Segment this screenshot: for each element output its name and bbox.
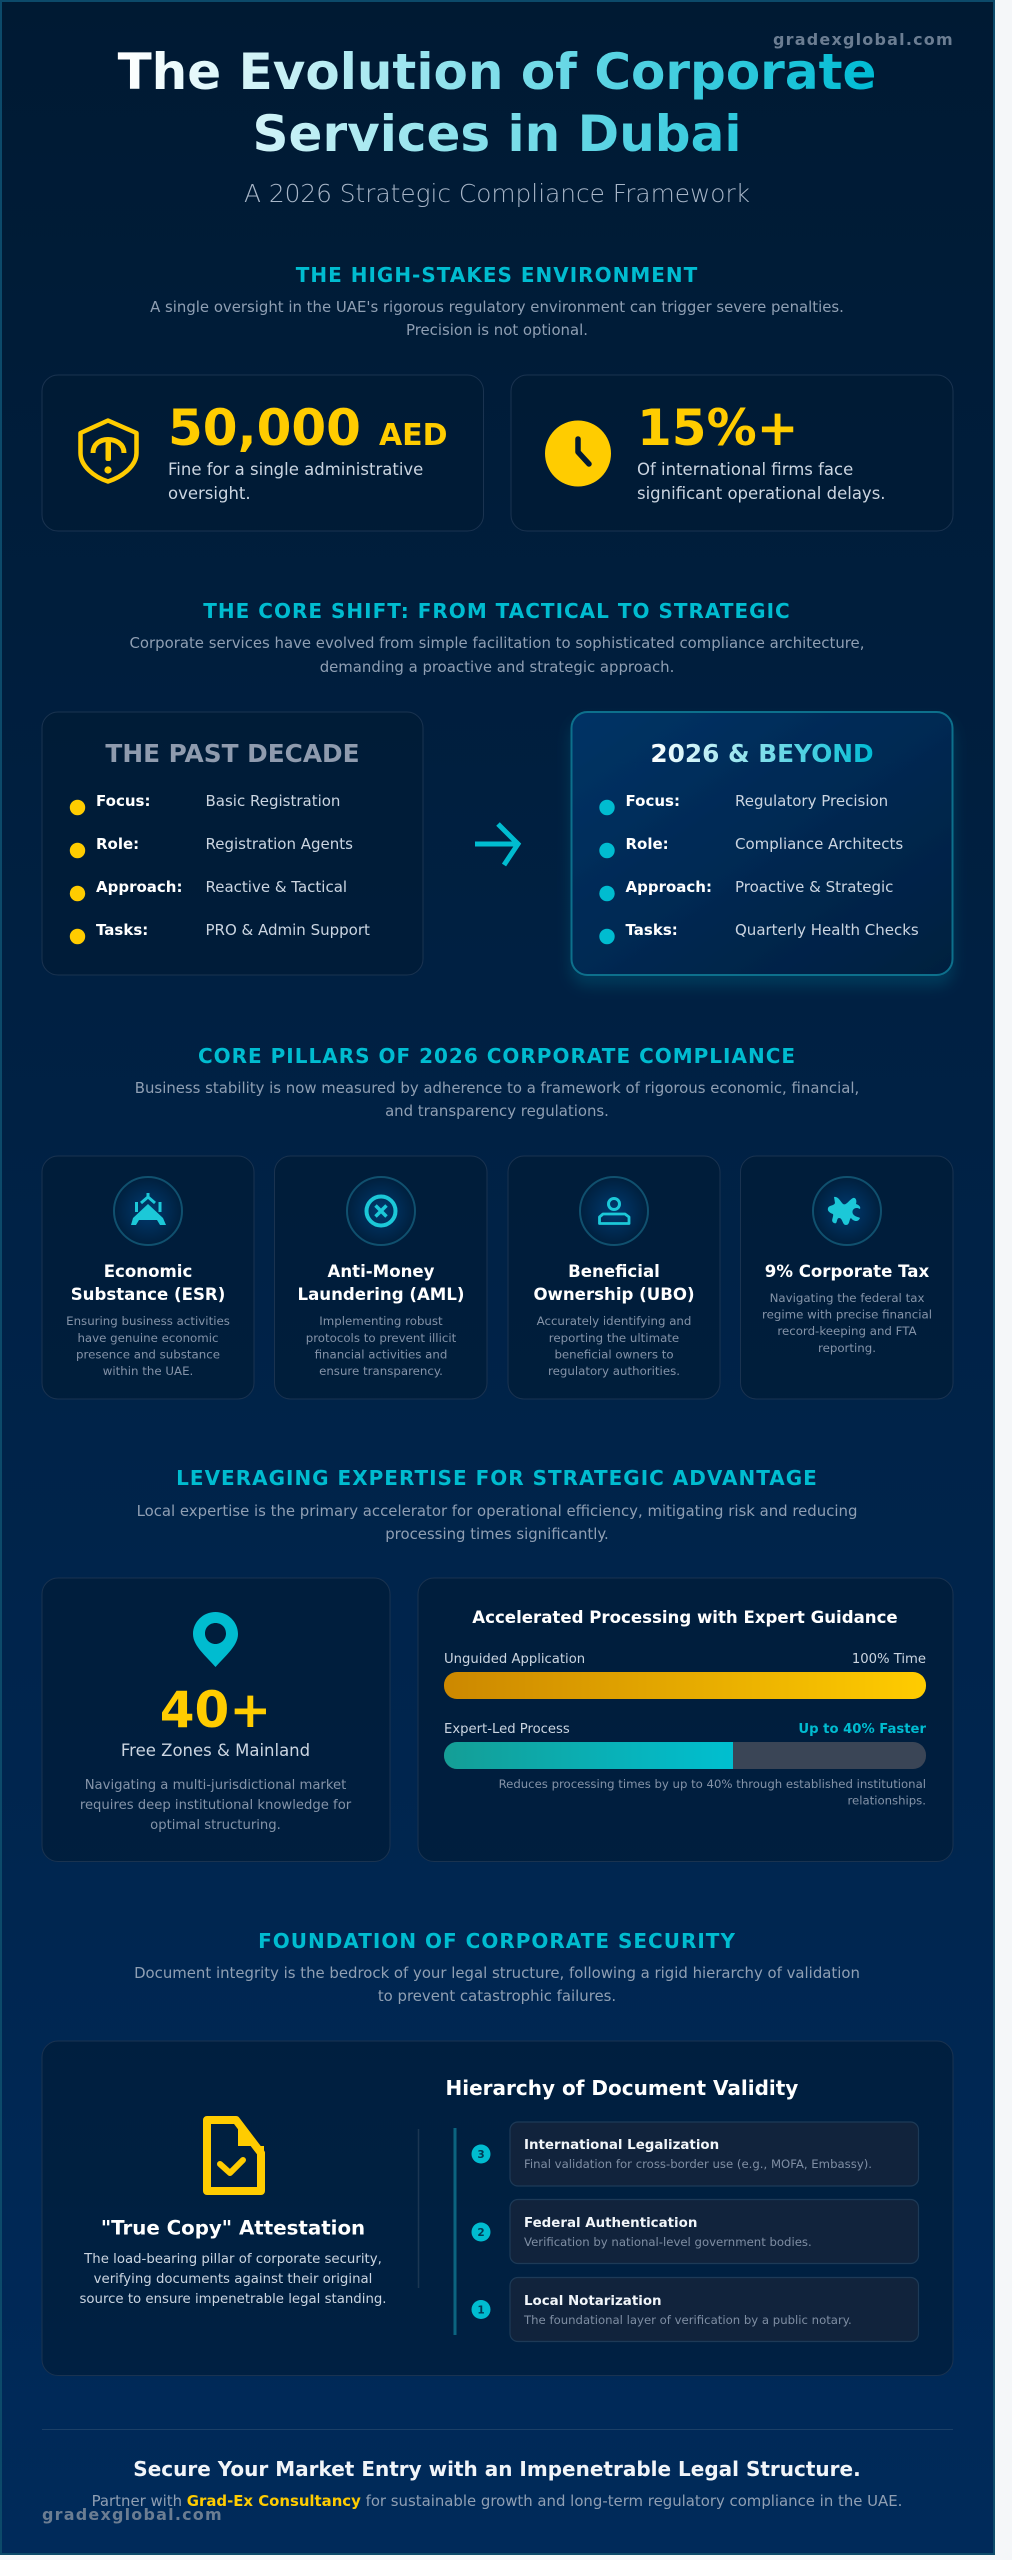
tier 1: The foundational layer of verification by a public notary.: [523, 2313, 852, 2327]
pillar card: UBO: [508, 1156, 720, 1399]
list row: tasks: Tasks:: [626, 921, 678, 939]
list row: role: Role:: [626, 835, 669, 853]
list row: approach: Approach:: [626, 878, 712, 896]
attestation title: "True Copy" Attestation: [101, 2216, 365, 2240]
stat description: significant operational delays.: [637, 484, 886, 503]
tier 2: Federal Authentication: [524, 2216, 697, 2231]
watermark: bottom left: gradexglobal.com: [42, 2505, 223, 2524]
panel: 2026 and beyond: [572, 712, 952, 975]
pillar description: Implementing robust: [319, 1314, 443, 1328]
intro text: A single oversight in the UAE's rigorous regulatory environment can trigger severe penalties.: [150, 298, 844, 316]
bar: expert-led process: Expert-Led Process: [444, 1722, 570, 1737]
header: [118, 43, 876, 208]
list row: focus: Focus:: [96, 792, 150, 810]
icon: prohibited x: [347, 1177, 415, 1245]
icon: person: [580, 1177, 648, 1245]
title: The Evolution of Corporate: [118, 43, 876, 101]
icon: shield warning: [80, 420, 136, 482]
list row: tasks: Tasks:: [96, 921, 148, 939]
pillar card: ESR: [42, 1156, 254, 1399]
intro text: and transparency regulations.: [385, 1102, 609, 1120]
tier 2: [472, 2200, 918, 2264]
intro text: Business stability is now measured by adherence to a framework of rigorous economic, financial,: [135, 1079, 859, 1097]
list row: focus: Focus:: [626, 792, 680, 810]
intro text: processing times significantly.: [385, 1525, 609, 1543]
icon: verified document: [207, 2118, 264, 2191]
stat card: 15%+: [511, 375, 953, 531]
intro text: to prevent catastrophic failures.: [378, 1987, 616, 2005]
intro text: Document integrity is the bedrock of your legal structure, following a rigid hierarchy of validation: [134, 1964, 860, 1982]
stat description: Fine for a single administrative: [168, 460, 423, 479]
pillar card: corporate tax: [740, 1156, 953, 1399]
intro text: Precision is not optional.: [406, 321, 588, 339]
list row: focus: Regulatory Precision: [735, 792, 888, 810]
chart note: relationships.: [847, 1794, 926, 1808]
tier 3: Final validation for cross-border use (e.g., MOFA, Embassy).: [524, 2157, 872, 2171]
list row: approach: Reactive & Tactical: [206, 878, 347, 896]
panel: processing bar chart: [418, 1578, 953, 1862]
pillar description: financial activities and: [315, 1348, 447, 1362]
section: high-stakes environment: [42, 263, 953, 531]
tier 1: Local Notarization: [524, 2294, 662, 2309]
pillar description: beneficial owners to: [554, 1348, 674, 1362]
pillar card: AML: [274, 1156, 487, 1399]
section: core pillars: [42, 1044, 953, 1399]
attestation description: source to ensure impenetrable legal standing.: [79, 2292, 387, 2307]
section: foundation of corporate security: [42, 1929, 953, 2376]
pillar title: 9% Corporate Tax: [765, 1262, 929, 1281]
subtitle: A 2026 Strategic Compliance Framework: [244, 179, 750, 208]
hierarchy timeline line: [454, 2128, 456, 2335]
list row: tasks: [599, 921, 919, 944]
intro text: Local expertise is the primary accelerator for operational efficiency, mitigating risk and reducing: [137, 1502, 857, 1520]
intro text: Corporate services have evolved from simple facilitation to sophisticated compliance architecture,: [130, 634, 864, 652]
pillar description: protocols to prevent illicit: [306, 1331, 457, 1345]
description: requires deep institutional knowledge for: [80, 1798, 352, 1813]
tier 3: 3: [477, 2149, 485, 2161]
pillar description: have genuine economic: [77, 1331, 219, 1345]
bar: unguided application: Unguided Application: [444, 1652, 585, 1667]
list row: approach: [70, 878, 347, 901]
footer call to action: [92, 2457, 902, 2510]
list row: role: Role:: [96, 835, 139, 853]
list row: focus: [599, 792, 888, 815]
list row: approach: Proactive & Strategic: [735, 878, 893, 896]
pillar title: Anti-Money: [328, 1262, 435, 1281]
icon: tax map: [813, 1177, 881, 1245]
pillar title: Laundering (AML): [298, 1285, 464, 1304]
list row: role: [70, 835, 353, 858]
icon: building: [114, 1177, 182, 1245]
watermark: top right: gradexglobal.com: [773, 30, 954, 49]
pillar description: within the UAE.: [103, 1364, 193, 1378]
panel heading: THE PAST DECADE: [105, 739, 360, 768]
pillar description: regulatory authorities.: [548, 1364, 680, 1378]
pillar description: presence and substance: [76, 1348, 220, 1362]
icon: clock: [545, 420, 611, 486]
pillar description: Navigating the federal tax: [770, 1291, 924, 1305]
stat value: 40+: [160, 1681, 271, 1739]
list row: role: [599, 835, 903, 858]
chart title: Accelerated Processing with Expert Guidance: [472, 1608, 898, 1627]
panel heading: 2026 & BEYOND: [650, 739, 874, 768]
list row: role: Compliance Architects: [735, 835, 903, 853]
stat description: oversight.: [168, 484, 251, 503]
tier 2: 2: [477, 2227, 485, 2239]
list row: tasks: Quarterly Health Checks: [735, 921, 919, 939]
heading: CORE PILLARS OF 2026 CORPORATE COMPLIANCE: [198, 1044, 796, 1068]
pillar description: ensure transparency.: [319, 1364, 443, 1378]
pillar description: reporting the ultimate: [549, 1331, 679, 1345]
attestation description: The load-bearing pillar of corporate security,: [83, 2252, 382, 2267]
chart note: Reduces processing times by up to 40% through established institutional: [499, 1777, 926, 1791]
list row: tasks: [70, 921, 370, 944]
intro text: demanding a proactive and strategic approach.: [320, 658, 674, 676]
tier 2: Verification by national-level government bodies.: [524, 2235, 812, 2249]
hierarchy heading: Hierarchy of Document Validity: [446, 2076, 798, 2100]
pillar description: Accurately identifying and: [537, 1314, 691, 1328]
list row: focus: Basic Registration: [206, 792, 340, 810]
bar: unguided application: [444, 1652, 926, 1699]
tier 3: [472, 2122, 918, 2186]
description: Navigating a multi-jurisdictional market: [85, 1778, 346, 1793]
pillar title: Beneficial: [568, 1262, 660, 1281]
heading: THE CORE SHIFT: FROM TACTICAL TO STRATEGIC: [203, 599, 791, 623]
list row: role: Registration Agents: [206, 835, 353, 853]
list row: tasks: PRO & Admin Support: [206, 921, 370, 939]
bar: expert-led process: Up to 40% Faster: [798, 1722, 926, 1737]
heading: FOUNDATION OF CORPORATE SECURITY: [258, 1929, 736, 1953]
section: leveraging expertise: [42, 1466, 953, 1862]
arrow: [475, 824, 518, 865]
panel: free zones: [42, 1578, 390, 1862]
stat card: 50,000 AED: [42, 375, 484, 531]
footer partner line: Partner with Grad-Ex Consultancy for sustainable growth and long-term regulatory compliance in the UAE.: [92, 2492, 902, 2510]
tier 1: 1: [477, 2304, 485, 2316]
pillar description: regime with precise financial: [762, 1308, 932, 1322]
pillar title: Substance (ESR): [71, 1285, 225, 1304]
list row: approach: Approach:: [96, 878, 182, 896]
description: optimal structuring.: [150, 1818, 281, 1833]
pillar title: Ownership (UBO): [533, 1285, 695, 1304]
list row: approach: [599, 878, 893, 901]
bar: expert-led process: [444, 1722, 926, 1769]
stat label: Free Zones & Mainland: [121, 1741, 310, 1760]
footer headline: Secure Your Market Entry with an Impenetrable Legal Structure.: [133, 2457, 861, 2481]
pillar description: record-keeping and FTA: [777, 1324, 917, 1338]
stat description: Of international firms face: [637, 460, 853, 479]
panel: the past decade: [42, 712, 423, 975]
stat value: 15%+: [637, 399, 799, 457]
attestation description: verifying documents against their original: [94, 2272, 372, 2287]
stat value: 50,000 AED: [168, 399, 448, 457]
panel: document security: [42, 2041, 953, 2376]
bar: unguided application: 100% Time: [852, 1652, 926, 1667]
heading: LEVERAGING EXPERTISE FOR STRATEGIC ADVANTAGE: [176, 1466, 818, 1490]
title: Services in Dubai: [253, 105, 741, 163]
pillar description: Ensuring business activities: [66, 1314, 230, 1328]
icon: location pin: [193, 1612, 238, 1667]
tier 3: International Legalization: [524, 2138, 719, 2153]
pillar description: reporting.: [818, 1341, 876, 1355]
tier 1: [472, 2278, 918, 2342]
heading: THE HIGH-STAKES ENVIRONMENT: [296, 263, 698, 287]
section: core shift: [42, 599, 952, 975]
list row: focus: [70, 792, 340, 815]
pillar title: Economic: [104, 1262, 192, 1281]
